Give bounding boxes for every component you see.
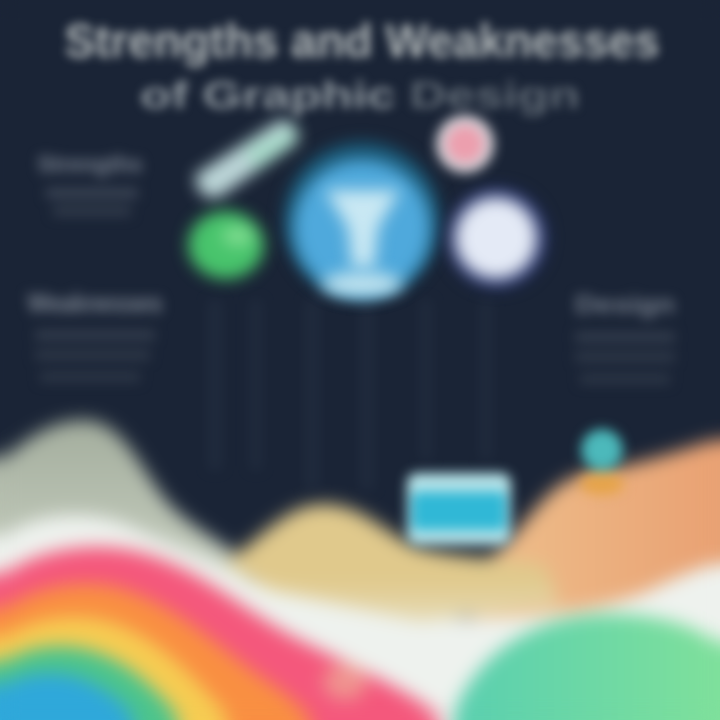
decorative column stripes (208, 300, 492, 490)
landscape: left grey hill (0, 420, 250, 640)
text block: middle right (575, 291, 675, 384)
icon: pencil (195, 120, 298, 198)
landscape: sand hill (225, 504, 560, 622)
icon: pink circle (436, 115, 494, 173)
green circle hill (452, 614, 720, 720)
text block: top left: Strengths (38, 151, 142, 177)
accent: pink patch on rainbow (323, 664, 367, 700)
text block: middle left: Weaknesses (28, 288, 162, 318)
chart: rainbow arcs (0, 547, 445, 720)
icon: globe (284, 142, 440, 298)
title: Strengths and Weaknesses (64, 14, 660, 67)
icon: white circle (447, 188, 547, 288)
title: of Graphic Design (140, 75, 580, 117)
icon: teal marker (580, 429, 624, 495)
landscape: white band (0, 515, 720, 720)
icon: green blob (188, 211, 264, 279)
text block: top left (38, 151, 142, 216)
title (64, 14, 660, 117)
text block: middle left (28, 288, 162, 382)
text block: middle right: Design (575, 291, 675, 319)
landscape: orange hill (470, 438, 720, 640)
icon: cyan box (407, 473, 511, 545)
